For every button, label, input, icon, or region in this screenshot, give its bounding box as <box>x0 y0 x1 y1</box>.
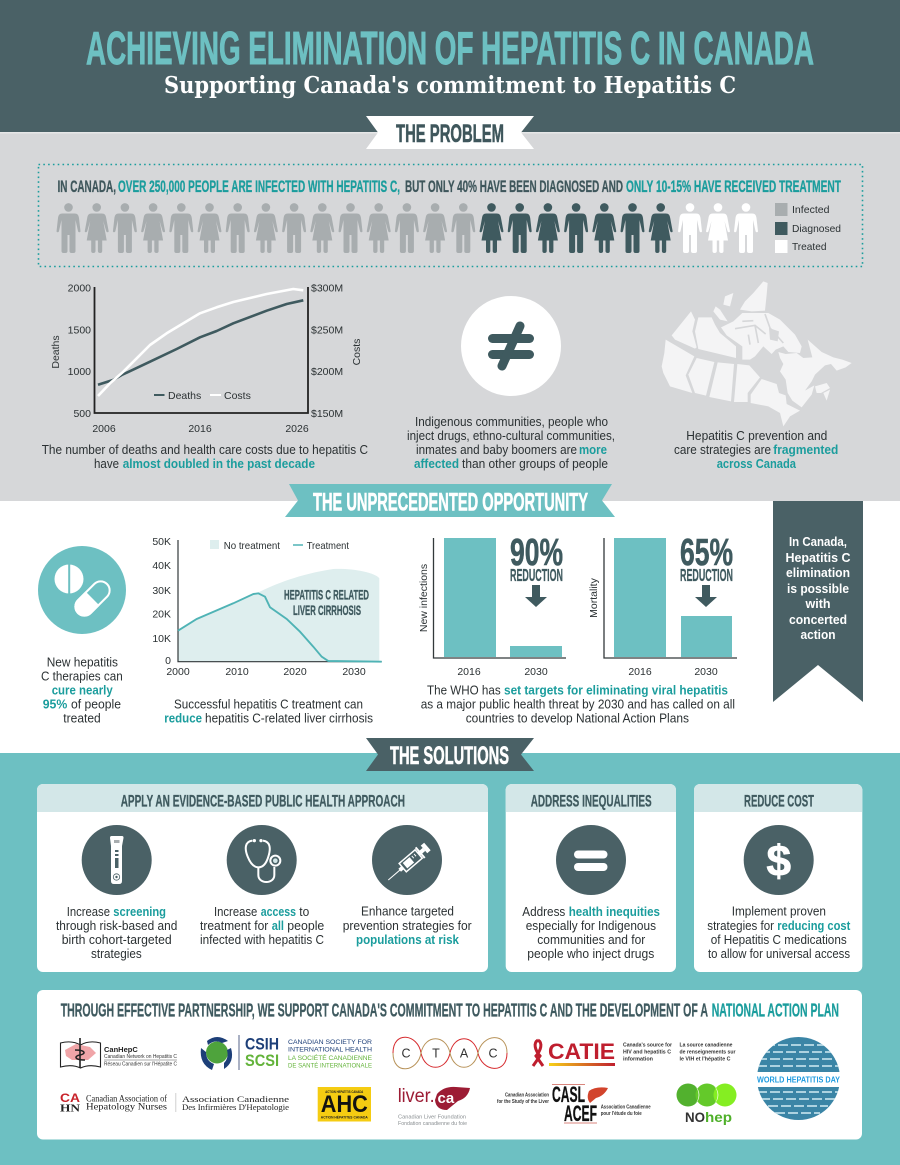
icon: not equal <box>461 296 561 396</box>
logo: CATIE: HIV and hepatitis C <box>623 1050 671 1056</box>
x axis labels: 2020 <box>283 666 307 678</box>
text: access: people <box>287 918 324 933</box>
logo: CASL ACEF: Association Canadienne <box>601 1104 651 1110</box>
caption: WHO targets: The WHO has <box>427 682 501 698</box>
area label <box>284 588 369 618</box>
banner: the unprecedented opportunity: THE UNPRECEDENTED OPPORTUNITY <box>313 488 588 516</box>
caption: affected groups: than other groups of people <box>462 456 608 471</box>
logo: CSIH SCSI: LA SOCIÉTÉ CANADIENNE <box>288 1053 373 1062</box>
logo: NOhep: hep <box>705 1109 732 1125</box>
logo: CATIE: Canada's source for <box>623 1042 673 1048</box>
logo: CSIH SCSI: DE SANTÉ INTERNATIONALE <box>288 1060 373 1070</box>
logo: World Hepatitis Day: WORLD HEPATITIS DAY <box>757 1076 841 1084</box>
caption: therapies cure <box>41 654 123 726</box>
caption: deaths and costs: almost doubled in the past decade <box>123 456 315 471</box>
y axis labels: costs: $150M <box>311 408 343 420</box>
y axis labels: deaths: 1500 <box>68 324 91 336</box>
statistic statement: OVER 250,000 PEOPLE ARE INFECTED WITH HEPATITIS C, <box>118 178 400 196</box>
text: reducing cost <box>707 904 851 961</box>
x axis labels <box>166 666 366 678</box>
logo: CanHepC: Réseau Canadien sur l'Hépatite C <box>104 1062 177 1068</box>
text: access: infected with hepatitis C <box>200 932 324 947</box>
arrow down <box>525 585 547 607</box>
logo: CASL ACEF: for the Study of the Liver <box>497 1099 550 1105</box>
logo: CAHN: Association Canadienne <box>182 1095 290 1104</box>
x axis labels: 2016 <box>188 423 212 435</box>
panel: infection statistics <box>38 164 862 266</box>
icon: stethoscope <box>227 825 297 895</box>
bar chart: mortality <box>588 532 737 678</box>
legend: Infected <box>792 204 830 216</box>
caption: cirrhosis reduction: hepatitis C-related liver cirrhosis <box>205 710 373 726</box>
logo: CanHepC: CanHepC <box>104 1045 138 1054</box>
logo: CATIE: CATIE <box>548 1039 615 1064</box>
y axis labels: 50K <box>152 536 171 548</box>
panel: address inequalities <box>506 784 676 972</box>
line chart: deaths and costs <box>50 282 363 435</box>
bar chart: new infections: REDUCTION <box>510 565 563 585</box>
banner: the solutions: THE SOLUTIONS <box>390 742 509 770</box>
chart legend: Treatment <box>307 540 349 552</box>
text: reducing cost: Implement proven <box>732 904 826 918</box>
banner: the problem: THE PROBLEM <box>396 120 504 148</box>
logo: CTAC: A <box>460 1046 469 1060</box>
text: prevention <box>343 904 472 947</box>
ribbon callout <box>773 501 863 702</box>
area label: HEPATITIS C RELATED <box>284 588 369 602</box>
text: prevention: populations at risk <box>356 932 460 947</box>
logo: liver.ca <box>398 1085 470 1127</box>
arrow down <box>695 585 717 607</box>
bar chart: new infections <box>418 532 566 678</box>
map: Canada fragmented <box>662 281 852 426</box>
caption: affected groups: more <box>579 442 607 457</box>
statistic statement <box>58 178 841 196</box>
legend <box>775 203 841 253</box>
logo: CanHepC <box>60 1038 177 1068</box>
bar chart: mortality: 2016 <box>628 666 652 678</box>
ribbon callout: Hepatitis C <box>786 551 850 565</box>
logo: CSIH SCSI: INTERNATIONAL HEALTH <box>288 1046 372 1054</box>
text: health inequities <box>522 904 660 961</box>
ribbon callout: elimination <box>786 566 850 580</box>
caption: fragmented strategies: Hepatitis C prevention and <box>686 428 827 443</box>
text: screening: through risk-based and <box>56 918 177 933</box>
x axis labels: 2026 <box>285 423 309 435</box>
caption: affected groups: inject drugs, ethno-cultural communities, <box>407 428 615 443</box>
caption: WHO targets: set targets for eliminating viral hepatitis <box>504 682 728 698</box>
deaths line <box>98 300 303 385</box>
y axis labels: 10K <box>152 633 171 645</box>
text: health inequities: especially for Indigenous <box>526 918 656 933</box>
area label: LIVER CIRRHOSIS <box>293 603 361 618</box>
legend: Treated <box>792 241 827 253</box>
caption: cirrhosis reduction <box>164 696 373 726</box>
logo: CASL ACEF <box>497 1082 651 1126</box>
caption: deaths and costs: have <box>94 456 119 471</box>
caption: therapies cure: treated <box>63 710 101 726</box>
caption: fragmented strategies: care strategies are <box>674 442 771 457</box>
logo: NOhep <box>676 1084 736 1125</box>
text: reducing cost: to allow for universal access <box>708 946 850 961</box>
logo: CTAC: C <box>488 1046 498 1060</box>
text: screening: screening <box>113 904 166 919</box>
text: access: treatment for <box>200 918 269 933</box>
text: access: to <box>299 904 309 919</box>
logo: AHC: AHC <box>321 1091 368 1118</box>
axis title: costs: Costs <box>351 339 363 365</box>
text: access <box>200 904 324 947</box>
y axis labels: deaths: 2000 <box>68 282 91 294</box>
bar chart: mortality: REDUCTION <box>680 565 733 585</box>
caption: WHO targets: as a major public health threat by 2030 and has called on all <box>421 696 735 712</box>
caption: WHO targets <box>421 682 735 726</box>
logo: CanHepC: Canadian Network on Hepatitis C <box>104 1054 177 1060</box>
treatment line <box>178 593 382 662</box>
panel: reduce cost: REDUCE COST <box>744 792 814 810</box>
caption: cirrhosis reduction: reduce <box>164 710 202 726</box>
logo: liver.ca: Canadian Liver Foundation <box>398 1114 466 1120</box>
y axis labels: costs <box>311 282 343 420</box>
caption: fragmented strategies <box>674 428 838 471</box>
ribbon callout: is possible <box>787 582 849 596</box>
caption: deaths and costs: The number of deaths and health care costs due to hepatitis C <box>42 442 368 457</box>
logo: CATIE: de renseignements sur <box>680 1050 736 1056</box>
y axis labels: costs: $200M <box>311 366 343 378</box>
text: screening: birth cohort-targeted <box>62 932 172 947</box>
caption: fragmented strategies: across Canada <box>717 456 797 471</box>
icon: pills <box>38 546 126 634</box>
y axis labels: 0 <box>165 655 171 667</box>
logo: CSIH SCSI <box>201 1034 373 1070</box>
chart legend <box>154 390 251 402</box>
chart legend: Deaths <box>168 390 201 402</box>
ribbon callout: with <box>804 597 830 611</box>
banner: the unprecedented opportunity <box>285 484 615 517</box>
banner: the solutions <box>366 738 534 771</box>
x axis labels: 2006 <box>92 423 116 435</box>
statistic statement: BUT ONLY 40% HAVE BEEN DIAGNOSED AND <box>405 178 623 196</box>
logo: CTAC: C <box>401 1046 411 1060</box>
icon: equals <box>556 825 626 895</box>
logo: liver.ca: liver. <box>398 1085 435 1107</box>
icon: dollar: $ <box>766 837 791 886</box>
panel: reduce cost <box>694 784 862 972</box>
caption: affected groups: Indigenous communities, people who <box>415 414 608 429</box>
caption: affected groups <box>407 414 615 471</box>
icon: dollar <box>744 825 814 895</box>
logo: CAHN: Des Infirmières D'Hepatologie <box>182 1102 289 1112</box>
banner: the problem <box>366 116 534 149</box>
logo: NOhep: NO <box>685 1109 705 1125</box>
logo: liver.ca: Fondation canadienne du foie <box>398 1121 467 1127</box>
panel: partnership <box>37 990 862 1140</box>
logo: CAHN: CA <box>60 1091 80 1105</box>
area chart: liver cirrhosis <box>152 536 382 678</box>
costs line <box>98 289 303 396</box>
y axis labels: 30K <box>152 585 171 597</box>
text: reducing cost: strategies for <box>707 918 775 933</box>
logo: CTAC: T <box>432 1046 440 1060</box>
text: health inequities: people who inject drugs <box>527 946 654 961</box>
x axis labels <box>92 423 309 435</box>
logo: CTAC <box>393 1037 507 1069</box>
ribbon callout: concerted <box>789 613 847 627</box>
x axis labels: 2010 <box>225 666 249 678</box>
text: health inequities: communities and for <box>537 932 646 947</box>
text: health inequities: health inequities <box>569 904 660 919</box>
logo: CATIE: information <box>623 1056 654 1062</box>
logo: CASL ACEF: CASL <box>552 1082 585 1107</box>
logo: CASL ACEF: Canadian Association <box>505 1092 549 1098</box>
subtitle: Supporting Canada's commitment to Hepatitis C <box>164 72 736 99</box>
y axis labels: costs: $300M <box>311 282 343 294</box>
text: access: Increase <box>214 904 257 919</box>
text: prevention: prevention strategies for <box>343 918 472 933</box>
y axis labels: 40K <box>152 560 171 572</box>
panel: evidence-based approach <box>37 784 488 972</box>
logo: CATIE: La source canadienne <box>680 1042 732 1048</box>
logo: CSIH SCSI: CANADIAN SOCIETY FOR <box>288 1039 372 1046</box>
bar chart: new infections: 2030 <box>524 666 548 678</box>
panel: evidence-based approach: APPLY AN EVIDENCE-BASED PUBLIC HEALTH APPROACH <box>121 792 405 810</box>
text: access: access <box>261 904 296 919</box>
logo: AHC: ACTION HÉPATITES CANADA <box>321 1114 368 1120</box>
bar chart: new infections: 90% <box>510 532 563 574</box>
text: reducing cost: reducing cost <box>777 918 851 933</box>
logo: CAHN <box>60 1091 290 1114</box>
icon: test strip <box>82 825 152 895</box>
text: prevention: Enhance targeted <box>361 904 454 918</box>
caption: affected groups: inmates and baby boomers are <box>416 442 577 457</box>
ribbon callout: In Canada, <box>789 535 847 549</box>
caption: therapies cure: New hepatitis <box>47 654 118 670</box>
y axis labels: deaths: 500 <box>73 408 91 420</box>
logo: CSIH SCSI: CSIH <box>245 1034 279 1054</box>
caption: cirrhosis reduction: Successful hepatitis C treatment can <box>174 696 363 712</box>
logo: CAHN: HN <box>60 1102 80 1114</box>
chart legend: Costs <box>224 390 251 402</box>
logo: CATIE <box>533 1039 736 1066</box>
caption: therapies cure: cure nearly <box>52 682 113 698</box>
caption: therapies cure: of people <box>71 696 121 712</box>
no treatment area <box>178 569 379 662</box>
logo: World Hepatitis Day <box>757 1037 840 1120</box>
y axis labels: 20K <box>152 608 171 620</box>
logo: AHC: ACTION HEPATITIS CANADA <box>325 1090 363 1094</box>
logo: CSIH SCSI: SCSI <box>245 1051 279 1070</box>
header band <box>0 0 900 132</box>
chart legend: No treatment <box>224 540 280 552</box>
panel: address inequalities: ADDRESS INEQUALITIES <box>531 792 652 810</box>
chart legend <box>210 540 349 552</box>
text: access: all <box>272 918 284 933</box>
text: screening: Increase <box>67 904 110 919</box>
caption: WHO targets: countries to develop National Action Plans <box>466 710 689 726</box>
logo: CAHN: Canadian Association of <box>86 1094 167 1104</box>
y axis labels: deaths: 1000 <box>68 366 91 378</box>
statistic statement: IN CANADA, <box>58 178 116 196</box>
caption: deaths and costs <box>42 442 368 471</box>
caption: affected groups: affected <box>414 456 459 471</box>
logo: CASL ACEF: ACEF <box>564 1101 597 1126</box>
pictogram: infected <box>56 203 475 253</box>
legend: Diagnosed <box>792 223 841 235</box>
text: screening: strategies <box>91 946 142 961</box>
ribbon callout: action <box>800 628 836 642</box>
axis title: deaths: Deaths <box>50 335 62 369</box>
logo: CAHN: Hepatology Nurses <box>86 1102 167 1112</box>
x axis labels: 2000 <box>166 666 190 678</box>
bar chart: mortality: 2030 <box>694 666 718 678</box>
bar chart: mortality: 65% <box>680 532 733 574</box>
x axis labels: 2030 <box>342 666 366 678</box>
pictogram: treated <box>678 203 758 253</box>
text: reducing cost: of Hepatitis C medications <box>711 932 847 947</box>
y axis labels <box>152 536 171 667</box>
caption: therapies cure: C therapies can <box>41 668 123 684</box>
logo: CASL ACEF: pour l'étude du foie <box>601 1111 642 1117</box>
text: health inequities: Address <box>522 904 565 919</box>
pictogram: diagnosed <box>480 203 673 253</box>
y axis labels: costs: $250M <box>311 324 343 336</box>
logo: CATIE: le VIH et l'hépatite C <box>680 1056 731 1062</box>
caption: fragmented strategies: fragmented <box>773 442 838 457</box>
text: screening <box>56 904 177 961</box>
bar chart: new infections: New infections <box>418 564 430 632</box>
logo: liver.ca: ca <box>438 1090 455 1107</box>
bar chart: mortality: Mortality <box>588 577 600 618</box>
caption: therapies cure: 95% <box>43 696 68 712</box>
y axis labels: deaths <box>68 282 91 420</box>
bar chart: new infections: 2016 <box>457 666 481 678</box>
icon: syringe <box>372 825 442 895</box>
